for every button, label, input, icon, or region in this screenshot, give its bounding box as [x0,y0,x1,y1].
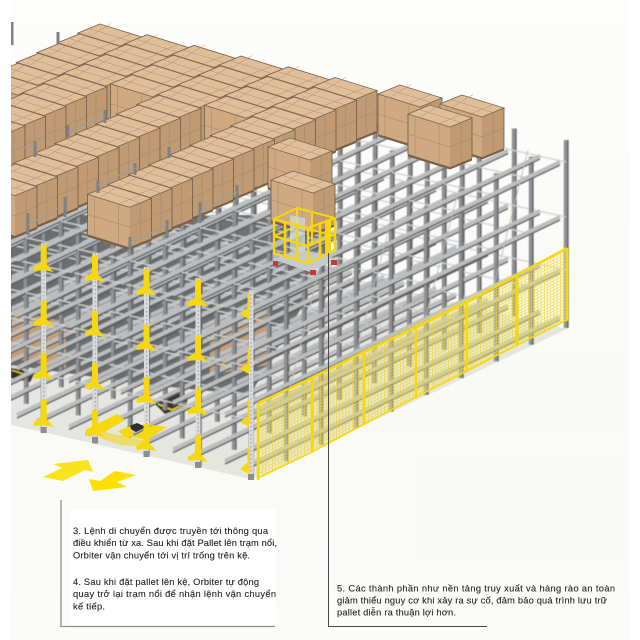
lighter patch on the floor [416,455,629,563]
diagonal bracing on the outer frames [287,150,528,400]
step 3 text: điều khiển từ xa. Sau khi đặt Pallet lên trạm nổi, [73,538,277,548]
fence frame [258,248,567,403]
stored boxes inside the rack [11,310,268,375]
step 3 text: 3. Lệnh di chuyển được truyền tới thông qua [73,526,269,536]
orbiter shuttles inside the rack [11,368,188,414]
safety fence [258,248,567,480]
rack guard posts between pallets [12,22,237,250]
pallet stacks [0,24,504,250]
rack with soft focus [11,122,570,478]
rack shadow underlay [11,215,330,395]
step 4 text [73,577,276,612]
carrier dark centre [127,423,146,432]
text panel: step 5: pallet diễn ra thuận lợi hơn. [337,608,456,618]
cage inner light panel [290,215,305,252]
step 3 text [73,526,277,560]
rack structure [0,22,569,478]
text panel: step 5: giảm thiểu nguy cơ khi xảy ra sự cố, đảm bảo quá trình lưu trữ [337,596,607,606]
text panel: step 5: 5. Các thành phần như nền tảng truy xuất và hàng rào an toàn [337,584,615,594]
callout leader for step 5 [328,253,487,626]
floor arrow: pointing down left [89,471,136,491]
rack guard rails [14,115,237,243]
front uprights with yellow protectors [34,243,254,480]
access platform with yellow cage [272,208,338,275]
platform red fittings [273,260,337,275]
step 4 text: quay trở lại trạm nổi để nhận lệnh vận chuyển [73,589,276,599]
text panel: steps 3 and 4 [70,509,277,625]
carrier right arm [133,425,167,440]
rack aisles [11,122,570,478]
platform deck [272,250,338,272]
fence mesh [258,248,567,478]
cage back panels [274,208,335,245]
step 4 text: kế tiếp. [73,602,105,612]
cage front frame [274,218,335,263]
text panel: step 5 [337,584,615,618]
step 4 text: 4. Sau khi đặt pallet lên kệ, Orbiter tự động [73,577,259,587]
callout leader for steps 3 and 4 [61,500,275,626]
step 3 text: Orbiter vận chuyển tới vị trí trống trên kệ. [73,550,250,560]
carrier body [100,431,146,447]
carrier left arm [85,414,125,436]
floor arrow: pointing up right [43,460,93,481]
cage gate [325,220,331,254]
warehouse floor under the racks [11,200,567,479]
yellow shuttle carrier on the floor [85,414,167,447]
